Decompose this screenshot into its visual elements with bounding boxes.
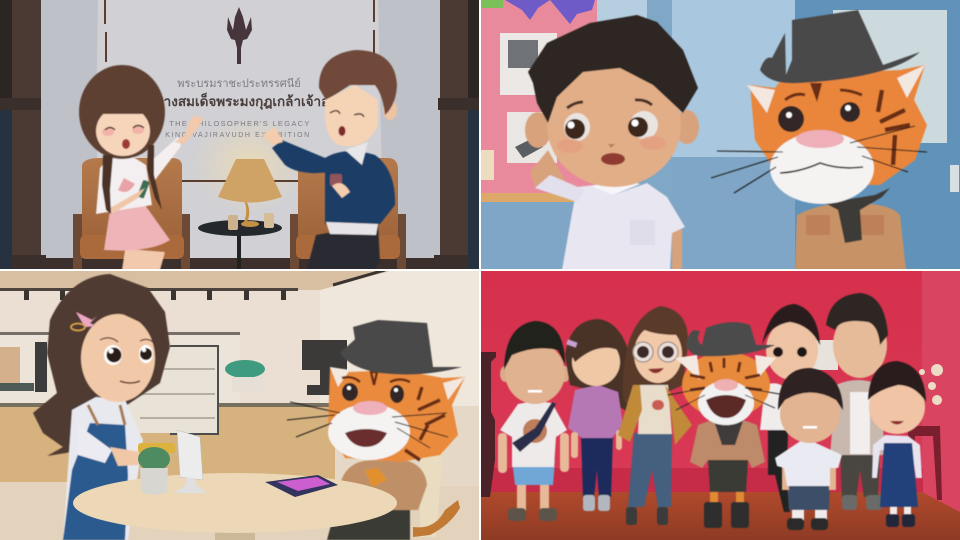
tablet screen	[277, 477, 330, 491]
exhibition title text: KING VAJIRAVUDH EXHIBITION	[165, 132, 311, 139]
character: girl with braids	[79, 65, 204, 270]
lighting rail	[0, 288, 298, 291]
panel: group portrait scene	[481, 271, 960, 540]
character: woman in lilac shirt	[565, 319, 633, 511]
right chair	[290, 158, 406, 269]
character: tiger scout	[668, 322, 785, 528]
character: cafe tiger head	[287, 320, 465, 462]
wooden floor	[481, 492, 960, 540]
banner hanging cords	[105, 0, 374, 181]
left chair	[73, 158, 190, 269]
exhibition title text	[155, 77, 329, 139]
window	[833, 10, 947, 143]
white shelf band	[0, 333, 240, 403]
shelf top line	[0, 332, 240, 335]
pink bulletin board	[481, 0, 597, 202]
potted plant on counter	[225, 360, 265, 377]
character: tall man in cardigan	[826, 293, 888, 510]
character: schoolgirl in pinafore	[868, 361, 926, 527]
cash register	[302, 340, 347, 395]
cafe upper wall	[0, 290, 320, 403]
left dark column	[0, 0, 46, 270]
classroom wall	[481, 157, 795, 269]
round table	[73, 473, 397, 540]
character: woman with glasses	[618, 306, 692, 525]
chair behind tiger	[420, 450, 443, 537]
character: worried boy	[525, 15, 699, 270]
character: woman behind	[760, 304, 820, 512]
wall skirting	[481, 468, 923, 492]
counter edge line	[0, 403, 335, 407]
character: stocky schoolboy	[775, 368, 843, 530]
flower pot on table	[138, 443, 175, 494]
gallery back wall	[41, 0, 440, 258]
green leaf tip	[481, 0, 503, 8]
character: boy in navy sweater	[262, 50, 397, 269]
tablet on table	[265, 475, 338, 497]
exhibition title text: พระบรมราชะประทรรศนีย์	[177, 77, 301, 90]
white flowers	[919, 364, 943, 405]
panel: boy and tiger classroom scene	[481, 0, 960, 270]
side table at right	[908, 426, 942, 500]
character: tiger with hat	[711, 10, 927, 270]
cafe floor	[0, 482, 480, 540]
character: boy with crossbody bag	[498, 321, 570, 521]
side table with lamp and cups	[198, 159, 282, 269]
glass display case	[125, 345, 219, 435]
tiger body	[327, 460, 427, 540]
character: girl barista	[33, 274, 170, 540]
tiger tail	[413, 500, 460, 537]
purple flowers	[505, 0, 595, 24]
display cabinet at left	[481, 352, 496, 497]
exhibition title text: THE PHILOSOPHER'S LEGACY	[169, 119, 311, 128]
rail spotlights	[24, 290, 286, 300]
picture frame behind group	[812, 340, 838, 370]
panel: cafe scene	[0, 270, 480, 540]
table menu card	[173, 430, 207, 493]
exhibition title text: ทางสมเด็จพระมงกุฎเกล้าเจ้าอ	[155, 92, 329, 110]
pale exhibition banner	[96, 0, 382, 258]
ceiling band	[0, 271, 390, 290]
lamp glow	[207, 129, 292, 190]
window latch	[950, 165, 959, 192]
panel: exhibition talk scene	[0, 0, 480, 270]
emblem	[227, 7, 252, 64]
right dark column	[434, 0, 480, 270]
left shelf goods	[0, 342, 47, 392]
tan lower counter	[0, 407, 335, 482]
angled track light	[333, 270, 385, 285]
dark floor strip	[42, 258, 440, 269]
red wall	[481, 271, 960, 540]
